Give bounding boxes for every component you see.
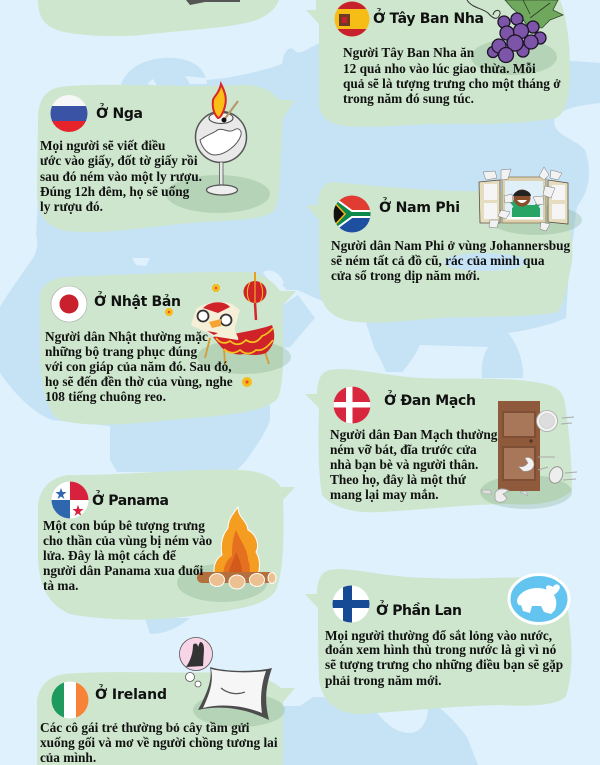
text: Denmark: nhà bạn bè và người thân. <box>330 457 478 472</box>
text: South Africa: cửa sổ trong dịp năm mới. <box>331 268 480 283</box>
text: Japan: với con giáp của năm đó. Sau đó, <box>45 359 232 374</box>
panel: South Africa <box>306 167 582 323</box>
text: Japan: Người dân Nhật thường mặc <box>45 329 208 344</box>
icon: elephant shape in water <box>509 574 569 624</box>
text: Russia: Mọi người sẽ viết điều <box>40 138 166 153</box>
text: Panama: lửa. Đây là một cách để <box>43 548 177 563</box>
heading: Spain: Ở Tây Ban Nha <box>373 8 484 27</box>
icon: pillow with dream bubble <box>180 638 285 727</box>
icon: blossoms <box>165 284 252 387</box>
text: Denmark: Theo họ, đây là một thứ <box>330 472 467 487</box>
heading: Panama: Ở Panama <box>92 490 169 509</box>
text: Japan: 108 tiếng chuông reo. <box>45 389 166 404</box>
text: Panama: cho thần của vùng bị ném vào <box>43 533 213 548</box>
icon: Ireland flag <box>51 681 89 719</box>
text: Spain: trong năm đó sung túc. <box>343 91 474 106</box>
panel: Russia <box>37 84 295 232</box>
heading: Denmark: Ở Đan Mạch <box>384 390 476 409</box>
text: Spain: Người Tây Ban Nha ăn <box>343 45 475 60</box>
panel: top-left cut-off bubble <box>38 0 279 36</box>
icon: grapes <box>467 0 563 75</box>
icon: Denmark flag <box>333 386 371 424</box>
blue highlight <box>443 253 527 271</box>
text: South Africa: sẽ ném tất cả đồ cũ, rác của mình qua <box>331 253 545 268</box>
panel: Denmark <box>305 369 577 512</box>
heading: Finland: Ở Phần Lan <box>376 600 462 619</box>
panel: Finland <box>305 569 572 714</box>
icon: door with broken plates <box>480 401 577 509</box>
text: Finland: Mọi người thường đổ sắt lỏng vào nước, <box>325 628 552 643</box>
panel: Panama <box>38 470 295 620</box>
text: Denmark <box>330 427 498 502</box>
text: Ireland: xuống gối và mơ về người chồng tương lai <box>40 735 278 750</box>
icon: bonfire <box>177 507 276 602</box>
heading: South Africa: Ở Nam Phi <box>379 197 460 216</box>
text: Russia: ước vào giấy, đốt tờ giấy rồi <box>40 153 198 168</box>
icon: window with person throwing papers <box>479 167 582 235</box>
icon: cut-off illustration <box>186 0 240 5</box>
text: Finland <box>325 628 563 688</box>
text: Japan <box>45 329 233 404</box>
text: Finland: sẽ tượng trưng cho những điều bạn sẽ gặp <box>325 657 563 672</box>
text: Russia: ly rượu đó. <box>40 199 103 214</box>
text: Ireland: của mình. <box>40 750 96 765</box>
text: Panama <box>43 518 213 593</box>
text: Finland: phải trong năm mới. <box>325 673 441 688</box>
text: Russia <box>40 138 202 214</box>
text: Spain <box>343 45 561 106</box>
text: Spain: quả sẽ là tượng trưng cho một tháng ở <box>343 76 561 91</box>
text: Ireland <box>40 720 278 765</box>
heading: Russia: Ở Nga <box>96 103 143 122</box>
text: Denmark: mang lại may mắn. <box>330 487 439 502</box>
icon: South Africa flag <box>333 195 372 233</box>
icon: Russia flag <box>50 95 88 133</box>
icon: Spain flag <box>334 2 370 36</box>
panel: Japan <box>40 272 296 425</box>
panel: Ireland <box>37 638 295 765</box>
text: Denmark: ném vỡ bát, đĩa trước cửa <box>330 442 477 457</box>
text: South Africa: Người dân Nam Phi ở vùng Johannersbug <box>331 238 571 253</box>
text: Panama: Một con búp bê tượng trưng <box>43 518 205 533</box>
text: Spain: 12 quả nho vào lúc giao thừa. Mỗi <box>343 61 536 76</box>
text: South Africa <box>331 238 571 283</box>
heading: Japan: Ở Nhật Bản <box>94 291 181 310</box>
text: Russia: Đúng 12h đêm, họ sẽ uống <box>40 184 190 199</box>
text: Ireland: Các cô gái trẻ thường bỏ cây tầm gửi <box>40 720 250 735</box>
text: Finland: đoán xem hình thù trong nước là gì vì nó <box>325 642 557 657</box>
text: Panama: tà ma. <box>43 578 78 593</box>
text: Japan: những bộ trang phục đúng <box>45 344 197 359</box>
text: Russia: sau đó ném vào một ly rượu. <box>40 169 202 184</box>
text: Japan: họ sẽ đến đền thờ của vùng, nghe <box>45 374 233 389</box>
icon: Panama flag <box>51 481 89 519</box>
icon: lion dance and lantern <box>191 272 291 374</box>
heading: Ireland: Ở Ireland <box>95 684 167 703</box>
panel: Spain <box>306 0 570 127</box>
text: Denmark: Người dân Đan Mạch thường <box>330 427 498 442</box>
icon: Finland flag <box>332 585 370 623</box>
text: Panama: người dân Panama xua đuổi <box>43 563 203 578</box>
icon: wine glass with burning paper <box>166 84 270 213</box>
icon: Japan flag <box>51 286 87 322</box>
